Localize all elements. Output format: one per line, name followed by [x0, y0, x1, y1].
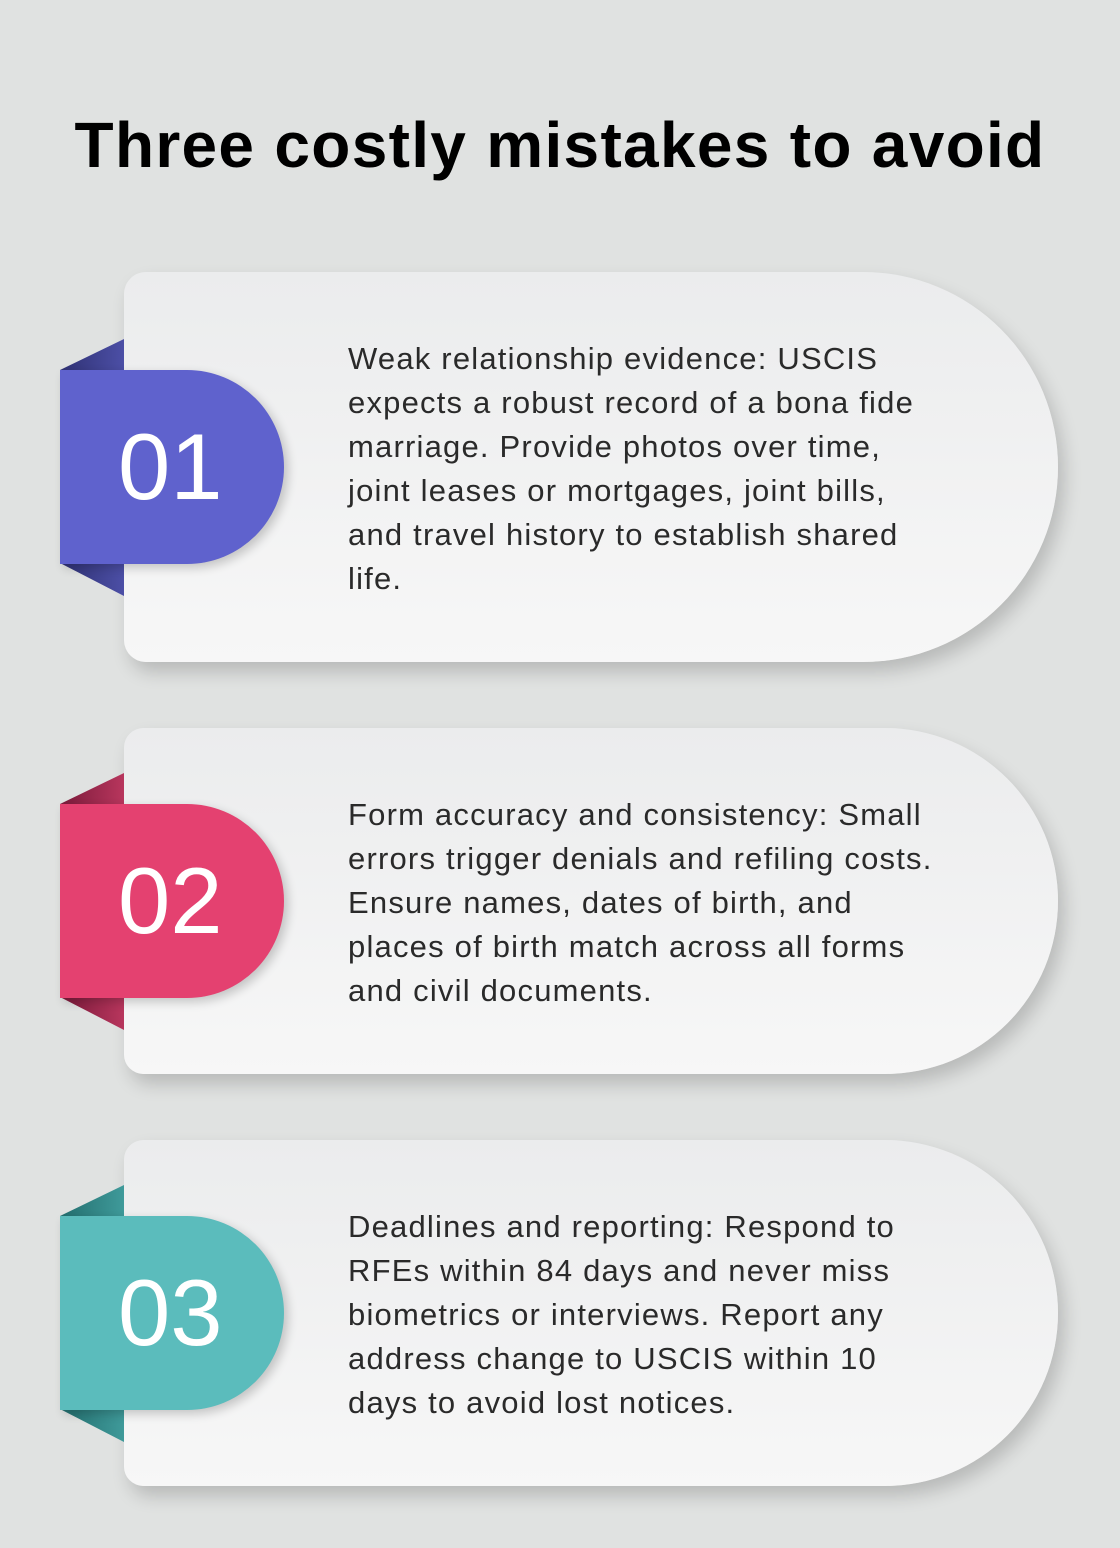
text: mistake 2: errors trigger denials and refiling costs. — [348, 841, 933, 876]
panel: mistake 3 card — [124, 1140, 1058, 1486]
text: mistake 1: life. — [348, 561, 402, 596]
text: mistake 2 — [348, 797, 933, 1008]
text: mistake 2: places of birth match across all forms — [348, 929, 905, 964]
panel: mistake 2 card — [124, 728, 1058, 1074]
text: mistake 1: Weak relationship evidence: USCIS — [348, 341, 878, 376]
badge 03 — [60, 1216, 284, 1410]
text: mistake 3: days to avoid lost notices. — [348, 1385, 735, 1420]
text: mistake 1: joint leases or mortgages, joint bills, — [348, 473, 886, 508]
text: mistake 1: expects a robust record of a bona fide — [348, 385, 914, 420]
icon: fold 3 — [60, 1185, 124, 1442]
text: mistake 1 — [347, 341, 914, 596]
text: mistake 2: Form accuracy and consistency: Small — [348, 797, 922, 832]
text: mistake 3: biometrics or interviews. Report any — [348, 1297, 884, 1332]
badge 01 — [60, 370, 284, 564]
text: mistake 3 — [348, 1209, 895, 1420]
text: mistake 2: Ensure names, dates of birth, and — [348, 885, 853, 920]
text: mistake 3: address change to USCIS within 10 — [348, 1341, 877, 1376]
text: mistake 1: and travel history to establish shared — [348, 517, 898, 552]
panel: mistake 1 card — [124, 272, 1058, 662]
icon: fold 1 — [60, 339, 124, 596]
badge 01: 01 — [118, 414, 223, 519]
icon: fold 2 — [60, 773, 124, 1030]
text: mistake 3: Deadlines and reporting: Respond to — [348, 1209, 895, 1244]
text: mistake 1: marriage. Provide photos over time, — [348, 429, 881, 464]
badge 03: 03 — [118, 1260, 223, 1365]
text: mistake 2: and civil documents. — [348, 973, 653, 1008]
text: mistake 3: RFEs within 84 days and never miss — [348, 1253, 890, 1288]
title: Three costly mistakes to avoid — [75, 109, 1045, 181]
badge 02: 02 — [118, 848, 223, 953]
badge 02 — [60, 804, 284, 998]
